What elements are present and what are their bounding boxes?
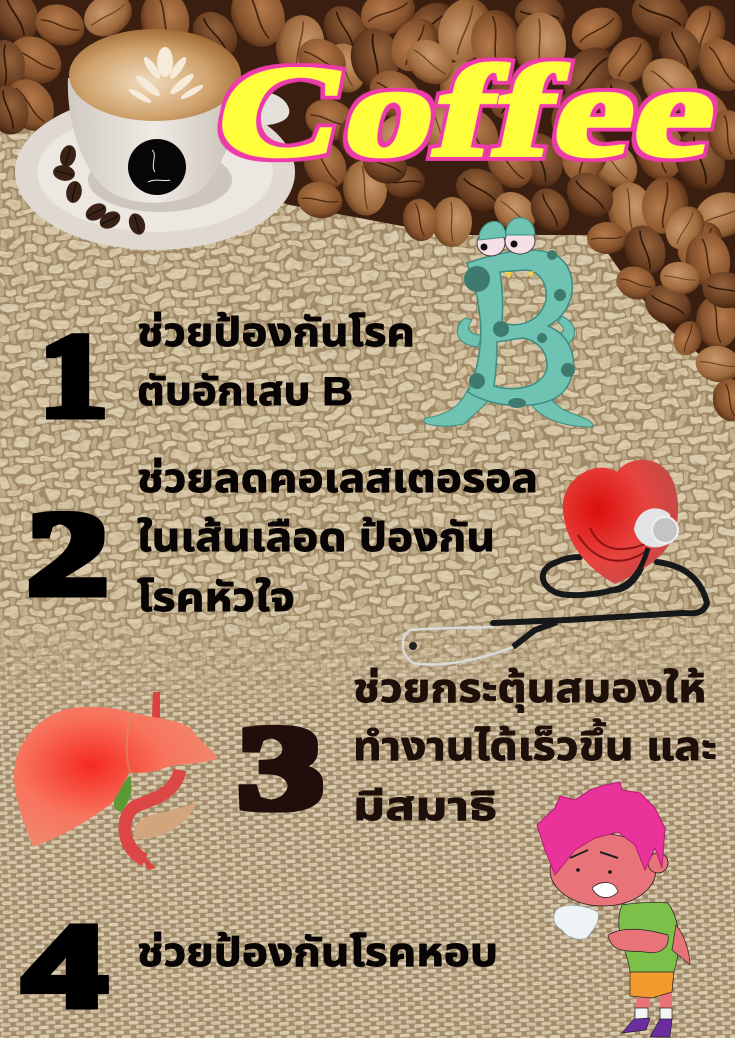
text: item 1 <box>137 310 415 414</box>
text: item 3: ทำงานได้เร็วขึ้น และ <box>353 718 717 769</box>
icon: coughing boy <box>537 782 690 1037</box>
icon: heart with stethoscope <box>403 460 707 665</box>
title: Coffee: Coffee <box>202 40 731 184</box>
number 4: 4 <box>23 899 107 1032</box>
text: item 3 <box>353 666 717 829</box>
icon: liver and pancreas <box>14 692 218 870</box>
text: item 3: มีสมาธิ <box>353 785 497 829</box>
text: item 2: ช่วยลดคอเลสเตอรอล <box>137 456 538 501</box>
text: item 1: ตับอักเสบ B <box>137 370 353 414</box>
text: item 2 <box>137 456 538 620</box>
text: item 1: ช่วยป้องกันโรค <box>137 310 415 355</box>
coffee beans border <box>0 0 735 424</box>
number 2: 2 <box>27 487 109 620</box>
number 1: 1 <box>39 309 108 442</box>
icon: coffee cup on saucer <box>15 29 295 250</box>
text: item 4: ช่วยป้องกันโรคหอบ <box>137 930 498 975</box>
text: item 3: ช่วยกระตุ้นสมองให้ <box>353 666 706 713</box>
text: item 2: โรคหัวใจ <box>137 576 295 620</box>
logo badge <box>128 139 186 195</box>
icon: green monster letter B <box>424 218 593 427</box>
latte art leaf <box>127 47 205 105</box>
number 3: 3 <box>237 702 324 834</box>
text: item 2: ในเส้นเลือด ป้องกัน <box>137 515 495 560</box>
saucer beans <box>52 143 148 237</box>
